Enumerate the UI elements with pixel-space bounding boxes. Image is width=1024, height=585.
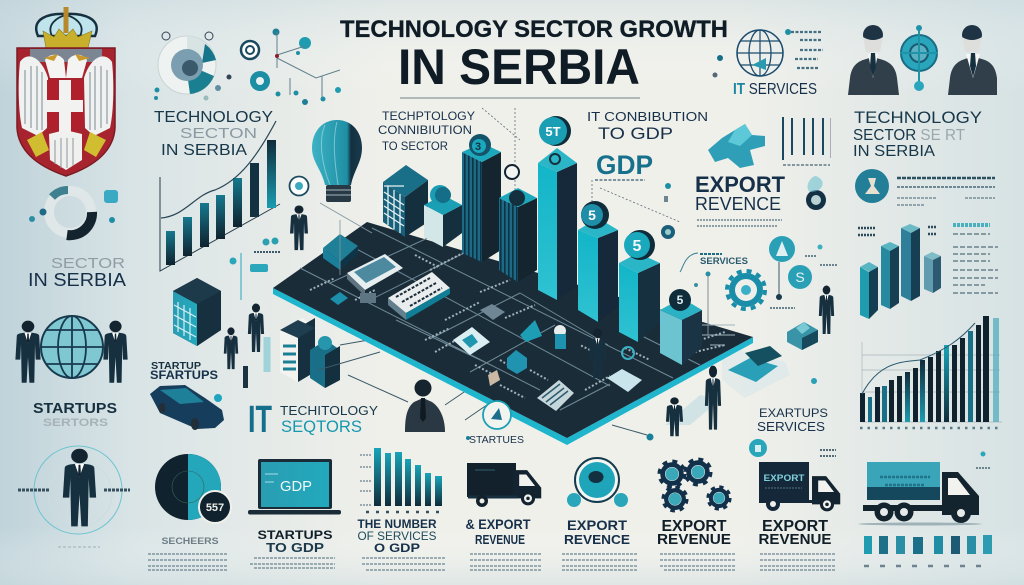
title: IN SERBIA — [398, 39, 640, 95]
panel: truck export revenue 2: EXPORT — [764, 473, 805, 483]
panel: gears export revenue: EXPORT — [662, 518, 727, 535]
platform grid and lines — [300, 228, 700, 410]
decorative title rule — [400, 97, 640, 99]
platform icons — [453, 327, 490, 355]
heading: technology contribution to sector: TECHPTOLOGY — [382, 109, 475, 123]
heading: IT contribution to GDP: IT CONBIBUTION — [587, 109, 708, 124]
small annotations near person — [230, 238, 280, 300]
icon: service badges: S — [795, 269, 805, 285]
bar 3 — [499, 165, 537, 282]
bar 4 — [538, 116, 577, 300]
panel: pie chart: SECHEERS — [162, 536, 218, 546]
heading: sector in Serbia: IN SERBIA — [28, 270, 126, 290]
heading: sector in Serbia: SECTOR — [51, 255, 125, 272]
panel: pie chart — [148, 454, 231, 570]
heading: exartups services: EXARTUPS — [759, 406, 828, 420]
panel: circle icon export revenence: REVENCE — [564, 532, 630, 547]
bar 1 — [424, 185, 462, 247]
label: IT services: IT SERVICES — [733, 81, 817, 98]
heading: IT contribution to GDP: GDP — [596, 150, 653, 180]
heading: startups: SERTORS — [43, 417, 108, 429]
panel: gears export revenue: REVENUE — [657, 531, 731, 548]
icon with description — [855, 169, 995, 205]
icon: service badges — [769, 176, 838, 308]
icon: person with badge — [290, 176, 372, 275]
panel: truck export revenue 2: REVENUE — [758, 531, 832, 548]
heading: services — [680, 253, 748, 272]
icon: globe IT services — [712, 29, 823, 78]
icon: server tower left — [173, 278, 221, 346]
heading: technology contribution to sector: CONNIBIUTION — [378, 123, 472, 137]
icon: network dots top — [241, 28, 341, 105]
platform card: chart — [347, 254, 403, 290]
heading: export revenue: REVENCE — [695, 194, 781, 214]
bar 5 — [578, 201, 618, 322]
heading: export revenue: EXPORT — [695, 172, 786, 197]
icon: gear network — [727, 271, 765, 309]
heading: startups car label: STARTUP — [151, 361, 201, 372]
panel: circle icon export revenence — [562, 458, 637, 570]
heading: technology sector right — [853, 108, 982, 160]
heading: exartups services — [757, 406, 828, 434]
panel: truck export revenue 2: EXPORT — [762, 518, 828, 535]
icon: bust person — [405, 380, 445, 432]
heading: services: SERVICES — [700, 256, 748, 266]
title: TECHNOLOGY SECTOR GROWTH — [340, 16, 728, 43]
icon: globe with two people — [15, 316, 128, 383]
panel: bar chart number of services: OF SERVICES — [358, 529, 436, 543]
icon: puzzle blob — [708, 124, 765, 168]
icon: circular diagram top left — [154, 32, 232, 100]
platform building — [323, 234, 358, 262]
panel: laptop GDP: TO GDP — [266, 540, 324, 555]
heading: technology sector in Serbia left: TECHNOLOGY — [154, 109, 273, 126]
title — [340, 16, 728, 95]
heading: technology sector in Serbia left — [154, 109, 273, 159]
label: startues: STARTUES — [469, 434, 524, 446]
bar chart: right growth — [860, 316, 1002, 428]
heading: startups — [33, 400, 117, 429]
heading: startups car label — [150, 361, 218, 382]
heading: technology sector right: SECTOR SE RT — [853, 127, 965, 144]
icon: person at box — [787, 286, 834, 350]
panel: truck export revenue 1 — [466, 463, 542, 570]
heading: startups: STARTUPS — [33, 400, 117, 417]
people and cards lower right — [646, 346, 817, 440]
bar 7: 5 — [677, 293, 684, 307]
platform card: report — [388, 272, 450, 313]
icon: small nodes — [661, 183, 710, 335]
heading: IT technology sectors: SEQTORS — [281, 417, 362, 436]
panel: laptop GDP — [248, 459, 341, 568]
icon: donut chart left — [29, 190, 118, 235]
bar 2: 3 — [475, 141, 481, 153]
heading: IT contribution to GDP — [587, 109, 708, 180]
bar 4: 5T — [545, 124, 561, 139]
icon: startup circle — [466, 401, 511, 440]
bar chart: 3D right — [858, 224, 998, 319]
heading: technology sector in Serbia left: SECTON — [180, 125, 257, 142]
icon: lightbulb — [312, 120, 362, 202]
caption under GDP — [595, 179, 645, 181]
bar 2 — [462, 134, 501, 262]
connector lines to platform — [318, 338, 647, 435]
panel: bar chart number of services — [358, 448, 445, 570]
people and server group — [224, 304, 340, 388]
panel: truck export revenue 2 — [749, 439, 840, 570]
heading: technology sector in Serbia left: IN SERBIA — [161, 142, 247, 159]
platform — [273, 222, 753, 445]
panel: truck export revenue 1: & EXPORT — [466, 516, 531, 532]
bar 5: 5 — [588, 207, 596, 223]
bar chart: top left growth — [160, 121, 280, 271]
panel: circle icon export revenence: EXPORT — [567, 517, 627, 533]
icon: Serbian coat of arms — [17, 7, 115, 176]
connector lines in bar area — [482, 108, 680, 235]
heading: technology contribution to sector — [378, 109, 475, 153]
panel: laptop GDP: GDP — [280, 478, 312, 495]
bar 6 — [619, 230, 660, 342]
bar 7 — [660, 289, 702, 365]
bar 6: 5 — [633, 238, 642, 255]
panel: laptop GDP: STARTUPS — [258, 528, 332, 542]
heading: technology sector right: TECHNOLOGY — [854, 108, 982, 127]
panel: large truck — [858, 452, 990, 526]
heading: IT contribution to GDP: TO GDP — [598, 124, 673, 143]
bars under large truck — [864, 535, 992, 566]
heading: exartups services: SERVICES — [757, 419, 825, 434]
panel: gears export revenue — [657, 460, 735, 570]
heading: technology sector right: IN SERBIA — [853, 143, 935, 160]
panel: bar chart number of services: THE NUMBER — [358, 517, 437, 531]
heading: IT technology sectors: IT — [248, 399, 272, 441]
panel: bar chart number of services: O GDP — [374, 541, 420, 555]
icon: building on platform — [383, 165, 428, 237]
heading: IT technology sectors: TECHITOLOGY — [280, 403, 378, 418]
icon: barcode chart — [783, 117, 831, 165]
heading: sector in Serbia — [28, 255, 126, 290]
icon: car — [150, 385, 224, 430]
heading: export revenue — [695, 172, 786, 226]
icon: two businessmen and gear — [848, 25, 997, 95]
panel: pie chart: 557 — [206, 502, 224, 514]
panel: truck export revenue 1: REVENUE — [475, 532, 525, 547]
heading: IT technology sectors — [248, 399, 378, 441]
heading: technology contribution to sector: TO SECTOR — [382, 139, 448, 153]
panel: person in orbit — [18, 446, 130, 547]
heading: startups car label: SFARTUPS — [150, 370, 218, 382]
